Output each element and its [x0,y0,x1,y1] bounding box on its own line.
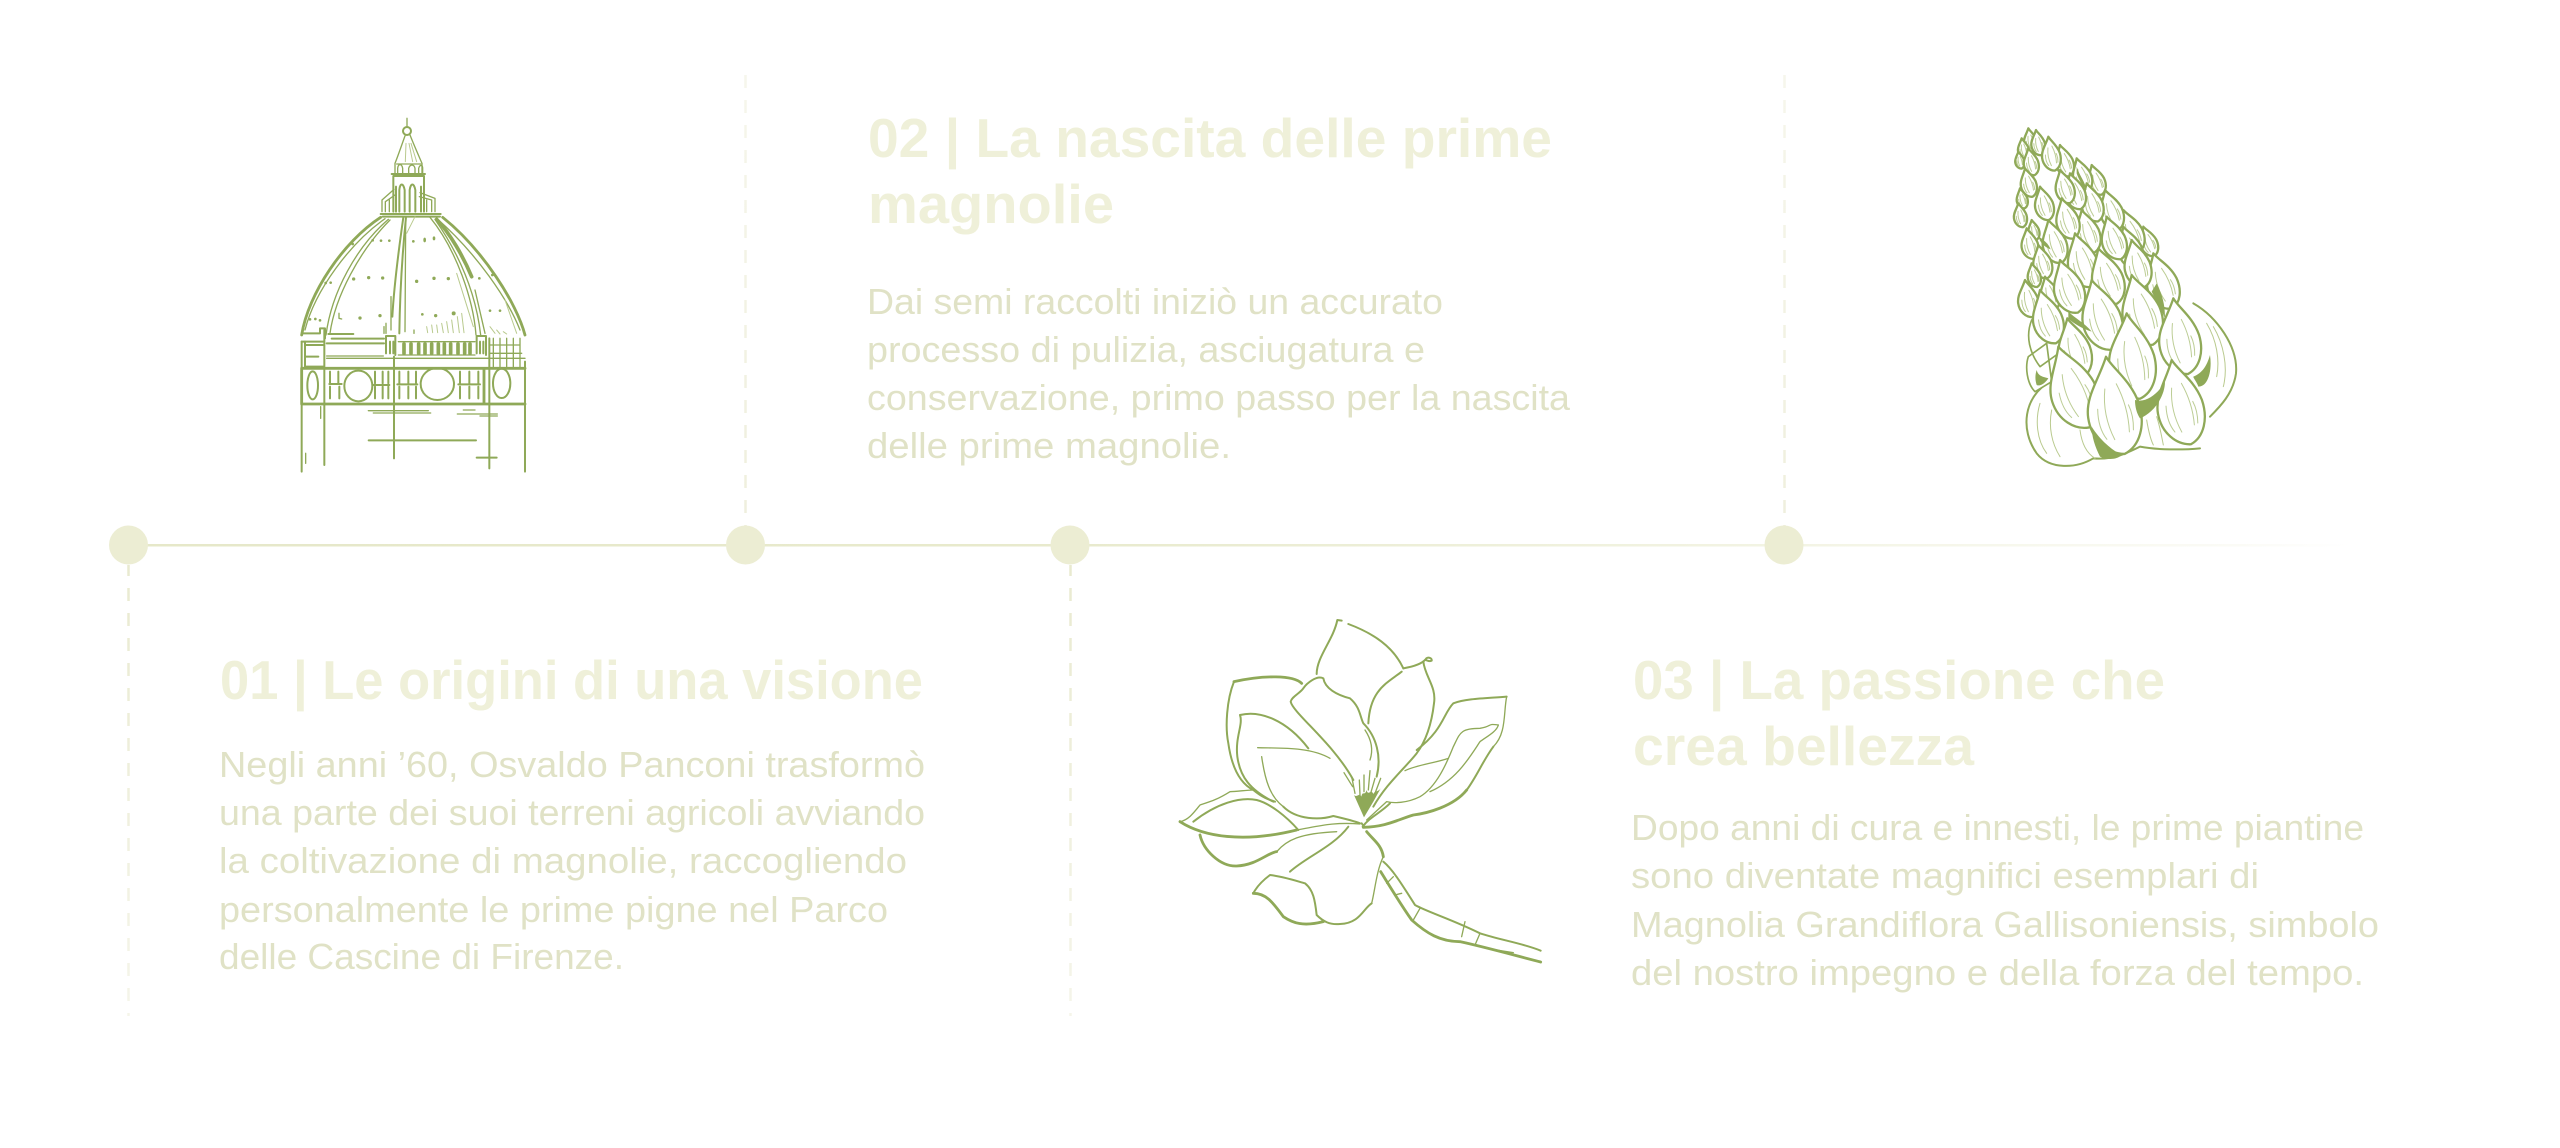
dashed guide lines [128,75,1784,1016]
heading 03: 03 | La passione che [1633,649,2165,712]
heading 02: 02 | La nascita delle prime [868,107,1552,170]
flower stem [1381,862,1541,962]
cone back outline [2026,303,2236,466]
heading 02: magnolie [868,173,1114,235]
heading 02 [868,107,1552,235]
heading 03: crea bellezza [1633,715,1974,777]
timeline marker 3 [1050,526,1090,564]
text block 01: delle Cascine di Firenze. [219,936,624,977]
timeline marker 1 [109,526,148,564]
text block 01: una parte dei suoi terreni agricoli avviando [219,792,925,833]
text block 03: Magnolia Grandiflora Gallisoniensis, simbolo [1631,904,2379,945]
panel: 01 origins [219,649,925,977]
text block 03: sono diventate magnifici esemplari di [1631,855,2259,896]
icon: magnolia flower [1180,620,1541,962]
text block 01: la coltivazione di magnolie, raccogliendo [219,840,907,881]
text block 03: Dopo anni di cura e innesti, le prime piantine [1631,807,2364,848]
icon: Florence cathedral dome [302,118,525,472]
timeline marker 2 [726,526,765,564]
text block 02: Dai semi raccolti iniziò un accurato [867,281,1443,322]
panel: 03 passion [1631,649,2379,993]
text block 02: delle prime magnolie. [867,425,1231,466]
heading 01: 01 | Le origini di una visione [220,649,923,712]
text block 03 [1631,807,2379,993]
text block 03: del nostro impegno e della forza del tempo. [1631,952,2364,993]
text block 02: processo di pulizia, asciugatura e [867,329,1425,370]
flower stamens [1344,771,1381,817]
timeline marker 4 [1764,526,1804,564]
panel: 02 first magnolias [867,107,1571,466]
text block 02 [867,281,1571,466]
text block 01 [219,744,925,977]
text block 01: personalmente le prime pigne nel Parco [219,889,888,930]
cone shadow crescents [2035,167,2211,459]
text block 02: conservazione, primo passo per la nascita [867,377,1571,418]
icon: magnolia seed cone [2012,127,2236,466]
heading 03 [1633,649,2165,777]
timeline [109,526,2350,564]
text block 01: Negli anni ’60, Osvaldo Panconi trasformò [219,744,925,785]
flower petals [1180,620,1507,924]
